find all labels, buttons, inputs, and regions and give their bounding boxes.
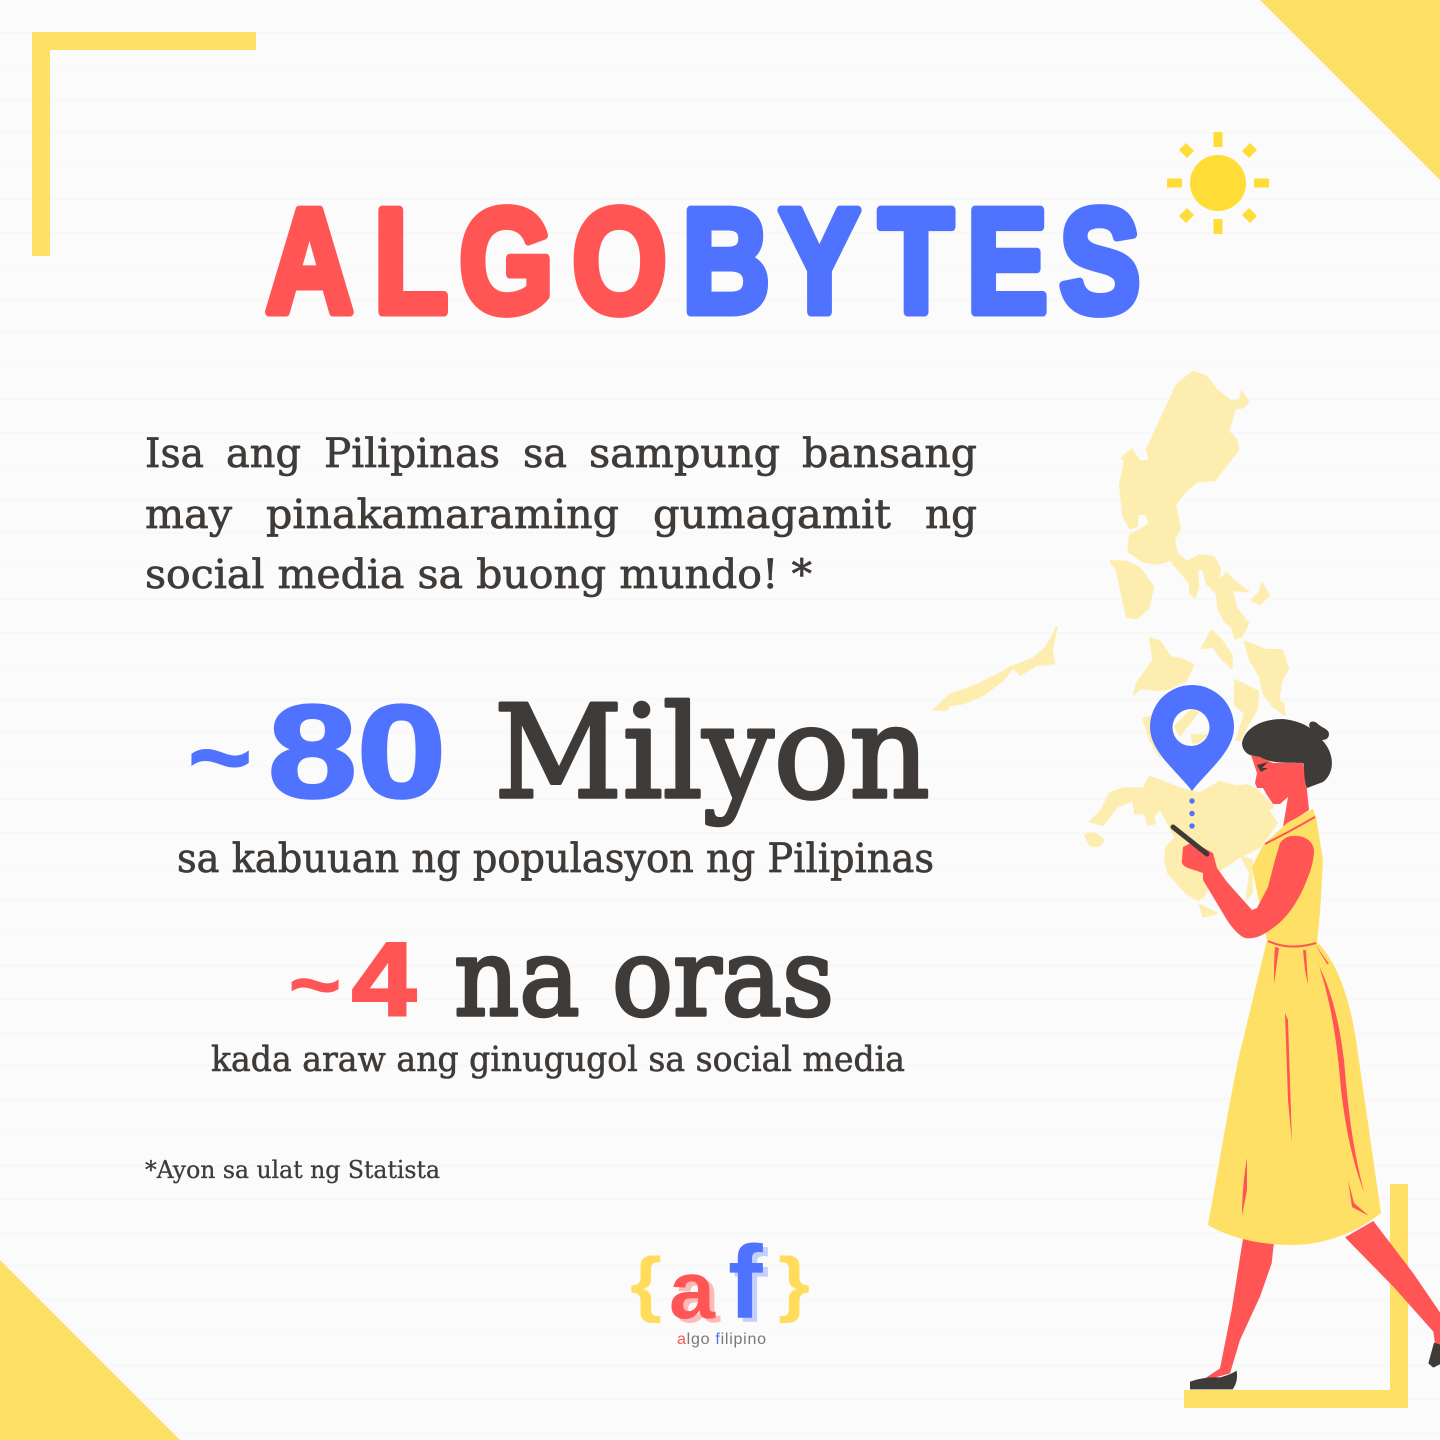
- stat: 80 million: Milyon: [494, 679, 930, 828]
- logo: a: [674, 1249, 721, 1340]
- woman illustration: [1173, 719, 1440, 1389]
- stat: 4 hours: [288, 916, 834, 1041]
- arm: [1182, 836, 1314, 938]
- intro paragraph: Isa: [145, 431, 204, 477]
- phone: [1173, 827, 1207, 854]
- corner bracket: bottom right: [1184, 1184, 1408, 1408]
- intro paragraph: sampung: [589, 431, 780, 477]
- collar line: [1265, 817, 1315, 844]
- logo: f: [728, 1225, 763, 1341]
- back leg: [1345, 1221, 1440, 1368]
- front leg and shoe: [1190, 1237, 1274, 1389]
- title: BYTES: [682, 177, 1140, 344]
- caption: population: sa kabuuan ng populasyon ng Pilipinas: [177, 836, 934, 882]
- caption: daily time: kada araw ang ginugugol sa social media: [211, 1040, 905, 1080]
- intro paragraph: social media sa buong mundo! *: [145, 552, 812, 598]
- logo: f: [733, 1229, 768, 1345]
- logo: }: [778, 1244, 810, 1324]
- logo: algo filipino: [677, 1331, 766, 1348]
- intro paragraph: Pilipinas: [324, 431, 500, 477]
- intro paragraph: ang: [226, 431, 301, 477]
- location pin: [1150, 685, 1234, 829]
- eye: [1257, 762, 1268, 772]
- skirt: [1208, 940, 1381, 1245]
- icon: sun: [1167, 132, 1269, 234]
- stat: 4 hours: ~: [288, 935, 342, 1035]
- logo: a: [669, 1245, 716, 1336]
- stat: 80 million: ~: [187, 691, 253, 823]
- map of the Philippines: [934, 372, 1288, 917]
- title: [266, 177, 1140, 344]
- stat: 80 million: [187, 678, 930, 828]
- corner triangle: top right: [1260, 0, 1440, 180]
- intro paragraph: pinakamaraming: [266, 492, 619, 538]
- source note: *Ayon sa ulat ng Statista: [145, 1156, 440, 1184]
- intro paragraph: may: [145, 492, 232, 538]
- logo: [630, 1225, 810, 1348]
- bodice: [1252, 809, 1323, 942]
- intro paragraph: gumagamit: [653, 492, 891, 538]
- neck and face: [1251, 755, 1309, 827]
- hair: [1242, 719, 1332, 788]
- stat: 4 hours: na oras: [454, 916, 834, 1041]
- corner triangle: bottom left: [0, 1260, 180, 1440]
- intro paragraph: ng: [925, 492, 977, 538]
- intro paragraph: sa: [523, 431, 567, 477]
- skirt folds: [1242, 944, 1369, 1216]
- intro paragraph: bansang: [802, 431, 977, 477]
- title: ALGO: [266, 177, 667, 344]
- logo: {: [630, 1244, 662, 1324]
- waist seam: [1268, 941, 1316, 947]
- corner bracket: top left: [32, 32, 256, 256]
- intro paragraph: [145, 431, 977, 598]
- stat: 4 hours: 4: [352, 922, 416, 1038]
- stat: 80 million: 80: [268, 678, 446, 825]
